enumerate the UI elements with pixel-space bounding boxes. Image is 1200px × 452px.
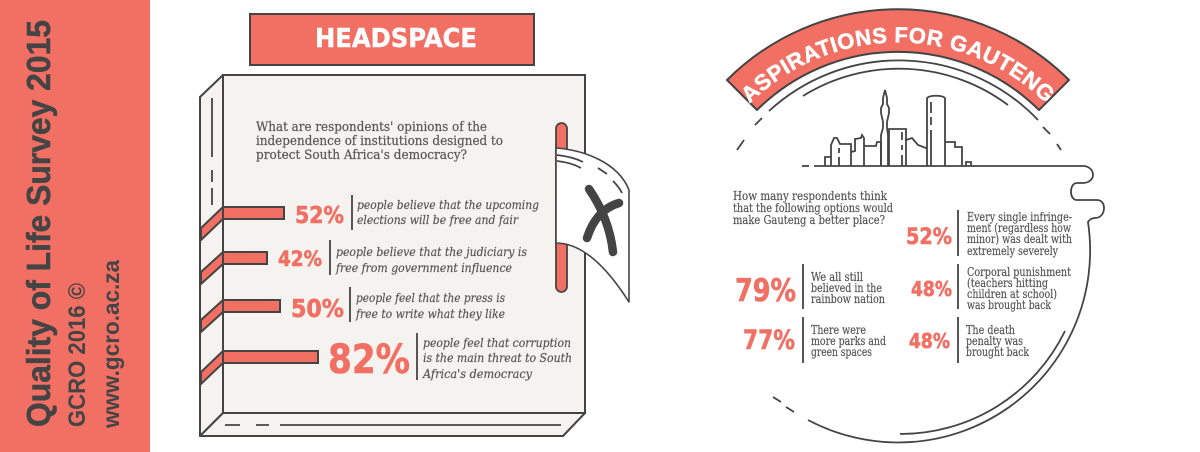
stat: 79 percent: rainbow nation xyxy=(811,292,885,306)
bar: 42 percent: 42% xyxy=(278,247,322,271)
stat: 48 percent death penalty: 48% xyxy=(909,329,950,353)
bar: 82 percent: Africa's democracy xyxy=(422,366,533,381)
book illustration xyxy=(200,75,585,436)
stat: 77 percent: There were xyxy=(811,323,866,337)
illustration: johannesburg skyline xyxy=(825,90,971,166)
stat: 52 percent: 52% xyxy=(906,225,952,250)
sidebar url: www.gcro.ac.za xyxy=(98,260,124,429)
stat: 48 percent corporal punishment: children at school) xyxy=(967,287,1057,301)
question text: make Gauteng a better place? xyxy=(733,212,885,227)
heading banner: aspirations for gauteng: ASPIRATIONS FOR GAUTENG xyxy=(743,27,1054,104)
bar: 82 percent: 82% xyxy=(328,337,410,383)
panel: sidebar xyxy=(0,0,150,452)
question text: protect South Africa's democracy? xyxy=(256,148,467,163)
question text: What are respondents' opinions of the xyxy=(256,120,487,135)
sidebar copyright: GCRO 2016 © xyxy=(64,283,91,427)
stat: 52 percent: minor) was dealt with xyxy=(967,232,1072,246)
panel: aspirations for gauteng xyxy=(726,8,1105,444)
stat: 48 percent death penalty: The death xyxy=(966,323,1015,337)
bar: 42 percent xyxy=(201,240,527,284)
stat: 48 percent death penalty: penalty was xyxy=(966,334,1023,348)
stat: 48 percent death penalty: brought back xyxy=(966,345,1030,359)
stat: 52 percent: ment (regardless how xyxy=(967,221,1072,235)
bar: 52 percent xyxy=(201,195,539,240)
stat: 77 percent xyxy=(743,317,886,363)
heading banner: headspace xyxy=(250,14,534,65)
stat: 52 percent: extremely severely xyxy=(967,244,1058,258)
question text xyxy=(256,120,503,163)
stat: 48 percent corporal punishment: Corporal punishment xyxy=(967,265,1071,279)
stat: 77 percent: 77% xyxy=(743,325,795,356)
stat: 79 percent: We all still xyxy=(811,270,863,284)
stat: 48 percent corporal punishment: was brought back xyxy=(967,298,1052,312)
bar: 50 percent: free to write what they like xyxy=(355,306,505,321)
stat: 79 percent xyxy=(735,264,885,309)
bar: 50 percent: people feel that the press is xyxy=(356,290,505,305)
icon: ballot flag with X xyxy=(556,123,629,302)
bar: 50 percent xyxy=(201,287,505,332)
bar: 82 percent xyxy=(201,333,572,384)
bar: 42 percent: people believe that the judiciary is xyxy=(336,244,527,259)
stat: 48 percent corporal punishment xyxy=(911,264,1071,312)
question text xyxy=(733,188,893,227)
decorative circle outline xyxy=(737,60,1104,442)
stat: 48 percent death penalty xyxy=(909,317,1030,363)
heading banner: headspace: HEADSPACE xyxy=(315,24,477,54)
panel: headspace xyxy=(200,14,629,436)
bar: 50 percent: 50% xyxy=(291,294,344,323)
question text: How many respondents think xyxy=(733,188,887,203)
stat: 79 percent: 79% xyxy=(735,273,796,309)
stat: 52 percent xyxy=(906,210,1072,258)
bar: 82 percent: is the main threat to South xyxy=(423,350,572,365)
sidebar title: Quality of Life Survey 2015 xyxy=(20,20,57,427)
bar: 52 percent: people believe that the upcoming xyxy=(357,197,539,212)
question text: independence of institutions designed to xyxy=(256,134,503,149)
bar: 82 percent: people feel that corruption xyxy=(423,335,571,350)
question text: that the following options would xyxy=(733,200,893,215)
bar: 52 percent: 52% xyxy=(295,203,344,229)
stat: 77 percent: more parks and xyxy=(811,334,886,348)
stat: 52 percent: Every single infringe- xyxy=(967,210,1072,224)
bar: 52 percent: elections will be free and fair xyxy=(357,212,519,227)
stat: 48 percent corporal punishment: (teachers hitting xyxy=(967,276,1048,290)
stat: 48 percent corporal punishment: 48% xyxy=(911,277,952,301)
bar: 42 percent: free from government influence xyxy=(335,260,512,275)
stat: 77 percent: green spaces xyxy=(811,345,872,359)
stat: 79 percent: believed in the xyxy=(811,281,882,295)
